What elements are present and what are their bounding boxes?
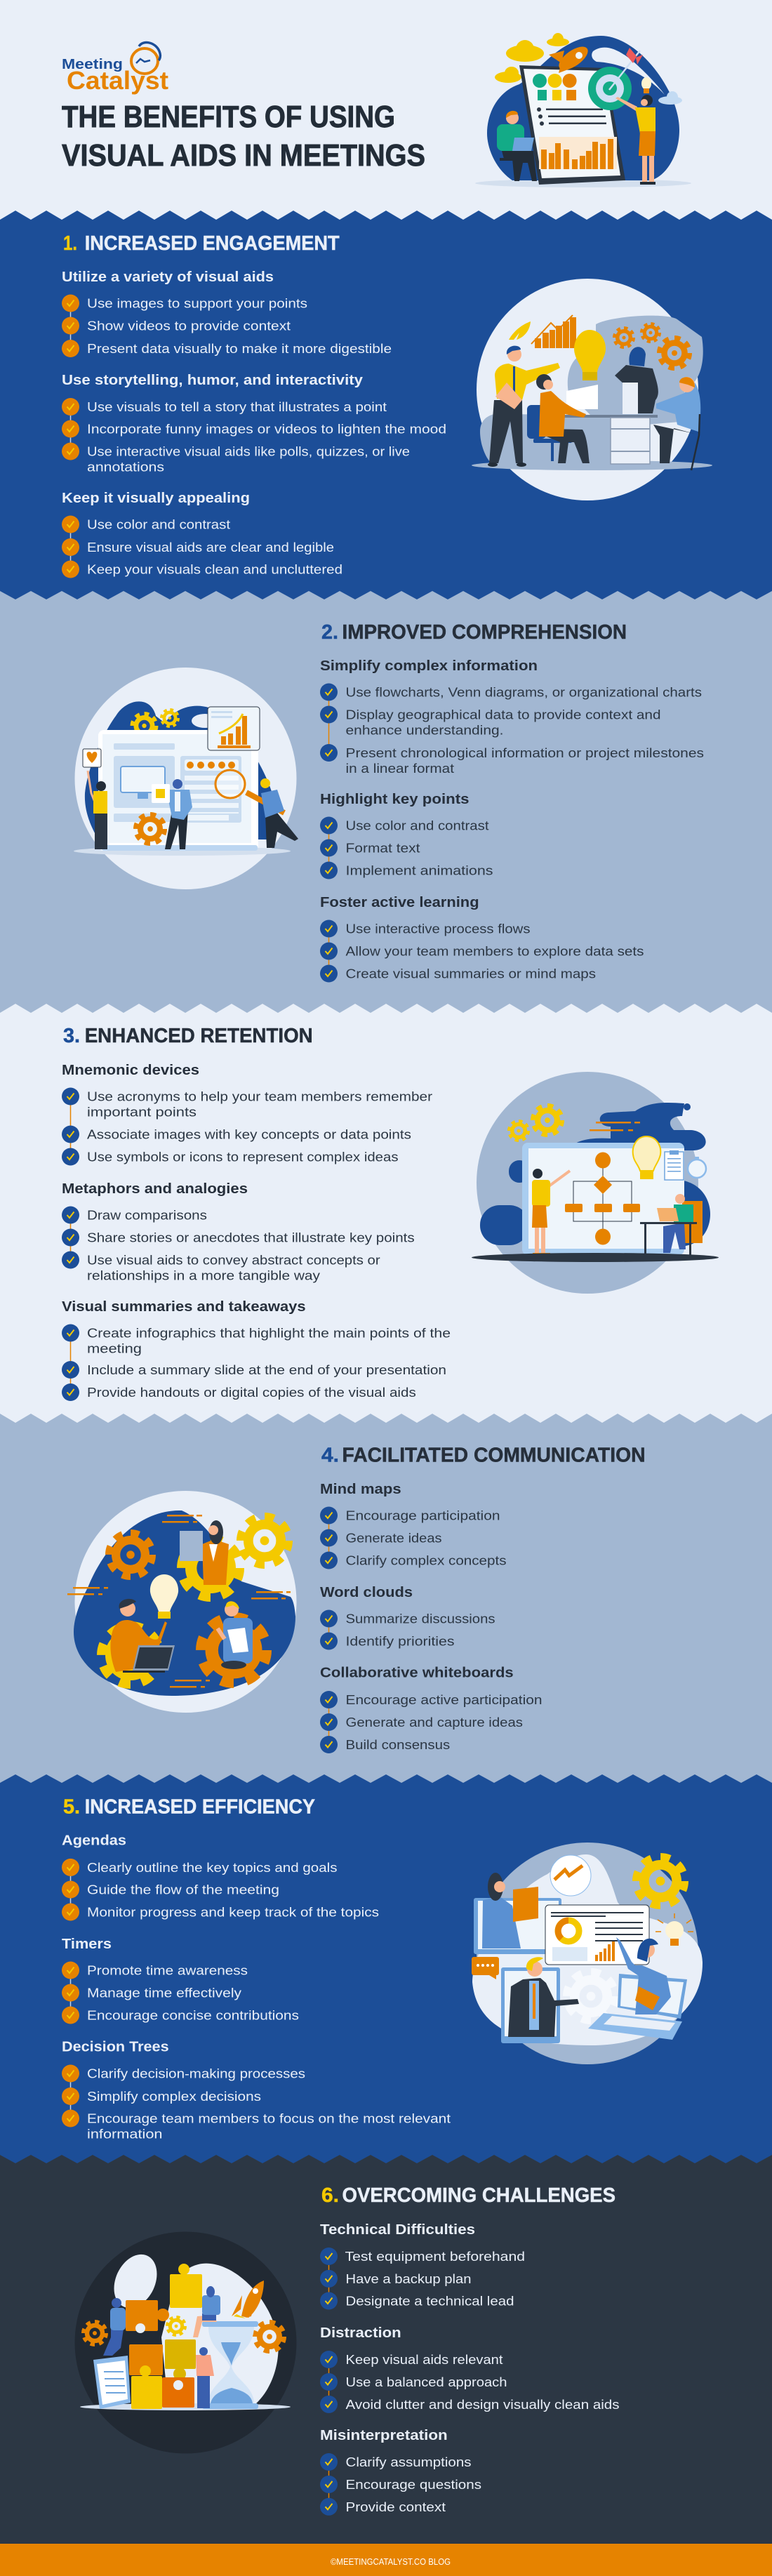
subsection: utilize a variety of visual aids: Show videos to provide context [87,319,291,333]
speed lines [67,1515,291,1687]
logo: Catalyst [67,66,168,95]
lightbulb [641,77,651,93]
subsection: simplify complex information: Present chronological information or project milestones [345,745,704,760]
subsection: mnemonic devices [62,1062,432,1165]
magnifier [215,770,284,813]
subsection: visual summaries and takeaways: meeting [87,1341,142,1356]
subsection: keep it visually appealing [62,490,342,578]
stopwatch [688,1157,706,1178]
flowchart [565,1153,640,1245]
subsection: simplify complex information: in a linear format [345,761,454,776]
subsection: highlight key points: Highlight key points [320,791,469,807]
subsection: word clouds: Summarize discussions [345,1612,495,1626]
subsection: mnemonic devices: Use symbols or icons to represent complex ideas [87,1150,399,1164]
subsection: metaphors and analogies: relationships in a more tangible way [87,1268,321,1283]
clipboard [93,2356,131,2409]
subsection: agendas: Agendas [62,1833,126,1849]
heading: 6. [321,2184,339,2207]
chart card [208,707,260,750]
text lines [537,107,606,126]
footer: ©MEETINGCATALYST.CO BLOG [331,2556,451,2567]
laptop with woman [588,1937,687,2040]
man with clipboard [218,1601,253,1669]
title: VISUAL AIDS IN MEETINGS [62,138,425,173]
panel: 3. enhanced retention [0,1004,772,1423]
subsection: use storytelling, humor, and interactivity: Use storytelling, humor, and interactivity [62,372,364,388]
heading: OVERCOMING CHALLENGES [342,2184,615,2207]
subsection: distraction: Use a balanced approach [345,2375,507,2389]
subsection: misinterpretation [320,2427,481,2516]
subsection: mnemonic devices: Mnemonic devices [62,1062,199,1078]
bar chart [539,137,617,169]
yellow gear [637,1857,684,1905]
speech bubble [472,1957,499,1979]
subsection: foster active learning: Allow your team members to explore data sets [345,943,644,959]
subsection: use storytelling, humor, and interactivity: Use visuals to tell a story that illustrates a point [87,399,387,414]
panel: 2. improved comprehension [0,591,772,1013]
gears [84,2322,106,2344]
subsection: metaphors and analogies: Use visual aids to convey abstract concepts or [87,1252,380,1268]
subsection: use storytelling, humor, and interactivity [62,372,446,474]
heading: IMPROVED COMPREHENSION [342,621,627,644]
heart card [83,749,101,767]
woman in yellow [88,771,107,849]
subsection: highlight key points: Use color and contrast [345,818,488,832]
heading: 5. [63,1795,80,1818]
subsection: word clouds: Identify priorities [345,1634,455,1648]
subsection: technical difficulties: Test equipment beforehand [345,2249,525,2264]
subsection: distraction: Avoid clutter and design visually clean aids [345,2397,619,2412]
subsection: collaborative whiteboards [320,1665,542,1753]
ground [472,1253,719,1262]
illustration: tablet with target and two people [475,33,691,187]
subsection: simplify complex information [320,658,704,776]
subsection: technical difficulties: Technical Difficulties [320,2222,475,2238]
subsection: use storytelling, humor, and interactivity: annotations [87,459,164,474]
woman with paper [180,1520,229,1585]
subsection: agendas: Guide the flow of the meeting [87,1883,279,1897]
footer [0,2544,772,2576]
heading: FACILITATED COMMUNICATION [342,1445,646,1467]
subsection: mind maps [320,1481,507,1569]
heading: ENHANCED RETENTION [85,1025,313,1047]
subsection: keep it visually appealing: Keep your visuals clean and uncluttered [87,562,342,577]
subsection: distraction: Keep visual aids relevant [345,2352,503,2367]
subsection: metaphors and analogies: Draw comparisons [87,1207,207,1223]
subsection: utilize a variety of visual aids: Present data visually to make it more digestible [87,341,392,356]
subsection: highlight key points: Implement animations [345,863,493,877]
subsection: collaborative whiteboards: Generate and capture ideas [345,1715,523,1729]
woman pointing [532,1169,570,1256]
subsection: simplify complex information: Display geographical data to provide context and [345,708,661,722]
subsection: timers: Manage time effectively [87,1985,242,2000]
subsection: word clouds [320,1584,495,1649]
board [522,1143,684,1255]
center report card [545,1905,649,1965]
seated man in blue [653,377,700,470]
rocket [232,2280,264,2318]
subsection: mnemonic devices: important points [87,1105,197,1119]
subsection: simplify complex information: Simplify complex information [320,658,538,674]
panel: 4. facilitated communication [0,1414,772,1783]
panel: 6. overcoming challenges [0,2155,772,2544]
orange gear [135,814,165,844]
man with laptop [110,1599,175,1673]
panel: header [0,0,772,220]
subsection: word clouds: Word clouds [320,1584,413,1600]
subsection: simplify complex information: enhance understanding. [345,723,504,737]
lightbulb [655,1913,693,1946]
subsection: foster active learning: Create visual summaries or mind maps [345,966,596,981]
subsection: simplify complex information: Use flowcharts, Venn diagrams, or organizational charts [345,685,702,699]
illustration: flowchart board [472,1072,719,1294]
subsection: agendas [62,1833,379,1920]
gears [614,328,634,347]
standing man in yellow [488,346,560,467]
desk [561,415,658,464]
subsection: foster active learning: Foster active learning [320,894,479,910]
subsection: collaborative whiteboards: Build consensus [345,1737,450,1752]
man with magnifier [260,778,298,848]
subsection: mind maps: Clarify complex concepts [345,1553,507,1568]
subsection: keep it visually appealing: Keep it visually appealing [62,490,250,506]
status circles [533,74,577,100]
subsection: keep it visually appealing: Ensure visual aids are clear and legible [87,540,334,555]
subsection: distraction: Distraction [320,2325,401,2341]
subsection: keep it visually appealing: Use color and contrast [87,517,230,532]
subsection: decision trees: Clarify decision-making processes [87,2066,305,2080]
clipboard [665,1150,684,1180]
heading: INCREASED EFFICIENCY [85,1795,315,1818]
lightbulb [574,330,606,380]
man with laptop [497,111,537,181]
title [62,100,425,173]
subsection: misinterpretation: Provide context [345,2499,446,2514]
subsection: timers: Timers [62,1936,112,1952]
illustration: review dashboard with magnifier [74,668,298,889]
subsection: decision trees: Simplify complex decisions [87,2089,261,2104]
subsection: visual summaries and takeaways: Create infographics that highlight the main points of the [87,1325,451,1341]
subsection: use storytelling, humor, and interactivity: Use interactive visual aids like polls, quizzes, or live [87,444,410,459]
gears [132,714,157,738]
subsection: mind maps: Generate ideas [345,1530,442,1546]
subsection: mnemonic devices: Associate images with key concepts or data points [87,1127,411,1141]
monitor [566,385,598,409]
woman seated on hourglass [193,2286,220,2337]
heading: INCREASED ENGAGEMENT [85,232,340,255]
subsection: timers: Promote time awareness [87,1963,248,1978]
woman in black blazer [615,347,658,414]
subsection: mind maps: Encourage participation [345,1508,500,1523]
illustration: people inside gears [67,1491,296,1713]
subsection: agendas: Clearly outline the key topics and goals [87,1860,337,1875]
subsection: metaphors and analogies: Metaphors and analogies [62,1181,248,1197]
subsection: misinterpretation: Encourage questions [345,2477,481,2492]
seated man at desk [640,1194,703,1256]
tablet [519,65,625,185]
puzzle pieces [126,2264,202,2409]
woman in blue blazer [152,779,192,849]
lightbulb [633,1136,660,1179]
subsection: visual summaries and takeaways: Visual summaries and takeaways [62,1299,306,1315]
subsection: decision trees: Decision Trees [62,2039,169,2055]
tablet [98,730,258,851]
heading: 1. [63,232,77,255]
woman pointing [615,95,655,185]
illustration: puzzle pieces and hourglass [74,2232,296,2454]
rising chart [531,315,576,348]
subsection: technical difficulties [320,2222,525,2309]
subsection: mnemonic devices: Use acronyms to help your team members remember [87,1089,432,1103]
subsection: metaphors and analogies [62,1181,415,1283]
trend circle [550,1855,591,1896]
subsection: technical difficulties: Designate a technical lead [345,2294,514,2308]
man with clipboard figure [103,2298,126,2356]
hourglass [202,2321,258,2409]
subsection: decision trees: information [87,2127,163,2141]
subsection: highlight key points: Format text [345,841,420,855]
subsection: visual summaries and takeaways: Include a summary slide at the end of your presentation [87,1362,446,1377]
illustration: remote video meeting [472,1843,703,2064]
subsection: collaborative whiteboards: Collaborative whiteboards [320,1665,514,1680]
subsection: utilize a variety of visual aids: Use images to support your points [87,296,307,310]
man raising hand [196,2347,214,2408]
subsection: distraction [320,2325,619,2413]
gears [109,1533,152,1576]
subsection: visual summaries and takeaways: Provide handouts or digital copies of the visual aids [87,1385,416,1400]
clouds [495,33,682,105]
subsection: decision trees [62,2039,451,2141]
logo: Meeting [62,57,123,72]
rocket [549,42,592,74]
heading: 3. [63,1025,80,1047]
white gear [567,1972,615,2020]
subsection: utilize a variety of visual aids: Utilize a variety of visual aids [62,269,274,285]
subsection: agendas: Monitor progress and keep track of the topics [87,1905,379,1919]
subsection: visual summaries and takeaways [62,1299,451,1401]
background blobs [480,1103,710,1247]
subsection: collaborative whiteboards: Encourage active participation [345,1692,542,1707]
panel: 5. increased efficiency [0,1774,772,2163]
subsection: metaphors and analogies: Share stories or anecdotes that illustrate key points [87,1230,415,1245]
target with arrow [588,48,643,110]
rocket [509,321,531,340]
panel: 1. increased engagement [0,211,772,599]
title: THE BENEFITS OF USING [62,100,395,134]
logo [62,43,168,95]
seated person in orange [527,374,590,463]
heading: 2. [321,621,338,644]
gears [533,1106,562,1135]
left video screen with woman [474,1873,561,1954]
subsection: technical difficulties: Have a backup plan [345,2271,472,2286]
subsection: mind maps: Mind maps [320,1481,401,1497]
subsection: foster active learning [320,894,644,983]
subsection: timers [62,1936,299,2024]
subsection: use storytelling, humor, and interactivity: Incorporate funny images or videos to lighten the mood [87,421,446,437]
subsection: misinterpretation: Clarify assumptions [345,2455,472,2469]
man screen [501,1957,579,2043]
subsection: timers: Encourage concise contributions [87,2007,299,2023]
subsection: highlight key points [320,791,493,879]
illustration: team at desk with lightbulb and gears [472,279,712,500]
subsection: decision trees: Encourage team members to focus on the most relevant [87,2111,451,2125]
subsection: misinterpretation: Misinterpretation [320,2427,448,2443]
subsection: foster active learning: Use interactive process flows [345,921,531,936]
subsection: utilize a variety of visual aids [62,269,392,357]
lightbulb [150,1574,178,1619]
heading: 4. [321,1445,339,1467]
